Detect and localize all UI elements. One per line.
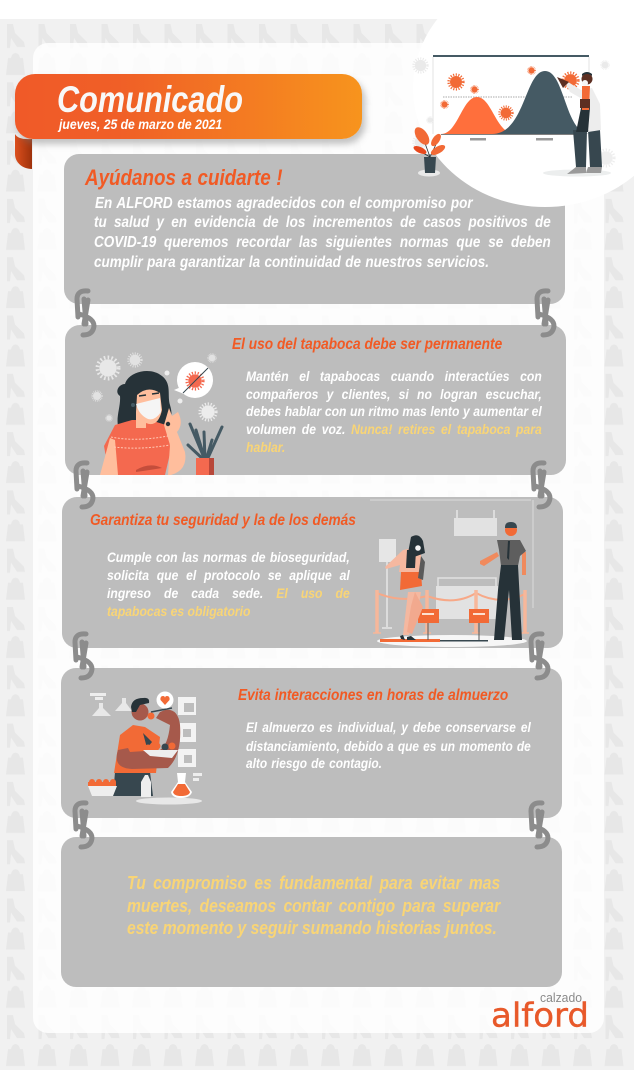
panel: Ayúdanos a cuidarte bbox=[64, 154, 565, 304]
jug bbox=[171, 773, 192, 798]
icon: plant bbox=[188, 424, 222, 475]
text block: almuerzo: distanciamiento, debido a que es un momento de bbox=[246, 738, 531, 754]
text block: mensaje final: muertes, deseamos contar contigo para superar bbox=[127, 896, 500, 916]
panel: compromiso bbox=[61, 837, 562, 987]
icon: virus speech bubble bbox=[174, 362, 213, 398]
text block: introducción: cumplir para garantizar la continuidad de nuestros servicios. bbox=[94, 254, 489, 271]
text block: bioseguridad: tapabocas es obligatorio bbox=[107, 603, 250, 619]
chart board bbox=[433, 55, 590, 140]
bowl of fruit bbox=[143, 742, 178, 758]
banner: Comunicado bbox=[14, 74, 368, 169]
text block: introducción: tu salud y en evidencia de los incrementos de casos positivos de bbox=[94, 214, 551, 231]
illustration: plant bbox=[414, 127, 446, 176]
logo: calzado alford: alford bbox=[491, 996, 589, 1034]
doctor bbox=[543, 72, 611, 176]
text block: mensaje final bbox=[127, 873, 501, 938]
text block: bioseguridad: solicita que el protocolo se aplique al bbox=[107, 567, 350, 583]
text block: almuerzo bbox=[246, 719, 531, 771]
sign posts bbox=[418, 609, 489, 640]
heading: uso del tapaboca: El uso del tapaboca debe ser permanente bbox=[232, 336, 502, 353]
text block: introducción: COVID-19 queremos recordar las siguientes normas que se deben bbox=[94, 234, 551, 251]
text block: tapabocas: Mantén el tapabocas cuando interactúes con bbox=[246, 368, 542, 384]
text block: bioseguridad: ingreso de cada sede. El uso de bbox=[107, 585, 350, 601]
panel: Garantiza tu seguridad bbox=[62, 497, 563, 648]
text block: tapabocas: hablar. bbox=[246, 439, 285, 455]
basket bbox=[88, 779, 117, 796]
heading: seguridad: Garantiza tu seguridad y la de los demás bbox=[90, 512, 356, 529]
text block: bioseguridad: Cumple con las normas de bioseguridad, bbox=[107, 549, 350, 565]
text block: mensaje final: Tu compromiso es fundamental para evitar mas bbox=[127, 873, 500, 893]
white circle behind chart bbox=[423, 19, 634, 207]
bottle bbox=[141, 775, 151, 797]
text block: tapabocas: compañeros y clientes, si no logran escuchar, bbox=[246, 386, 542, 402]
text block: bioseguridad bbox=[107, 549, 350, 619]
ribbon curl bbox=[15, 134, 32, 169]
woman bbox=[385, 535, 425, 640]
ribbon body bbox=[15, 74, 362, 139]
text block: introducción: En ALFORD estamos agradecidos con el compromiso por bbox=[95, 195, 473, 212]
illustration: curvas de contagio con médico bbox=[412, 55, 616, 176]
title: Comunicado bbox=[57, 79, 243, 120]
text block: almuerzo: alto riesgo de contagio. bbox=[246, 755, 382, 771]
rope barriers bbox=[373, 590, 529, 633]
text block: tapabocas: volumen de voz. Nunca! retires el tapaboca para bbox=[246, 421, 542, 437]
icon: heart bubble bbox=[156, 692, 174, 708]
date: jueves, 25 de marzo de 2021 bbox=[59, 116, 222, 132]
text block: almuerzo: El almuerzo es individual, y debe conservarse el bbox=[246, 719, 531, 735]
text block: tapabocas bbox=[246, 368, 542, 455]
heading: almuerzo: Evita interacciones en horas de almuerzo bbox=[238, 687, 508, 704]
panel: Evita interacciones bbox=[61, 668, 562, 818]
security guard bbox=[480, 522, 526, 640]
logo: calzado alford: calzado bbox=[540, 990, 582, 1005]
text block: mensaje final: este momento y seguir sumando historias juntos. bbox=[127, 918, 497, 938]
virus icons bbox=[413, 59, 614, 166]
panel: El uso del tapaboca bbox=[65, 325, 566, 475]
heading: Ayúdanos a cuidarte: Ayúdanos a cuidarte ! bbox=[85, 165, 283, 190]
text block: introducción bbox=[94, 195, 551, 271]
text block: tapabocas: debes hablar con un ritmo mas lento y aumentar el bbox=[246, 403, 542, 419]
